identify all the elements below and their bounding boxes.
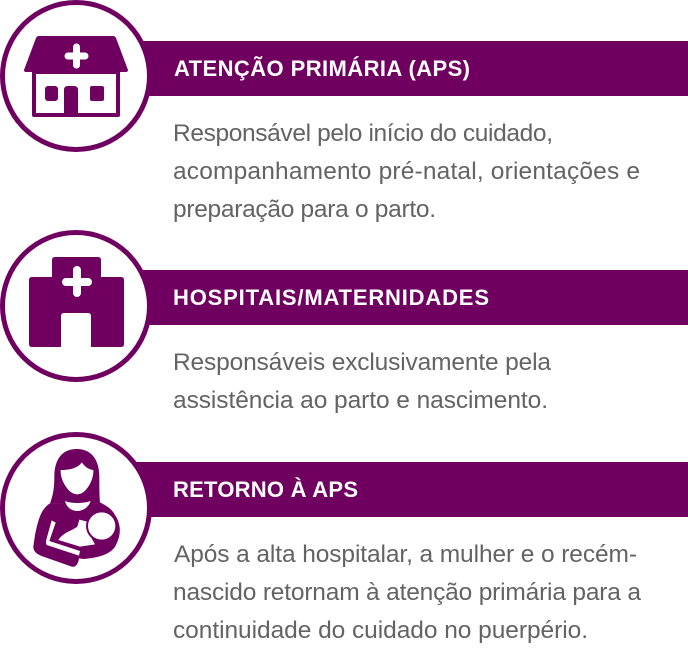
text block: hospitais/maternidades: assistência ao parto e nascimento. (173, 387, 548, 414)
panel: retorno à aps (2, 434, 688, 644)
heading bar: atenção primária (140, 41, 688, 96)
text block: retorno à aps (173, 541, 641, 644)
panel: hospitais/maternidades (2, 232, 688, 414)
icon: hospital (2, 232, 150, 380)
icon: mother holding baby (2, 434, 150, 582)
text block: retorno à aps: continuidade do cuidado no puerpério. (173, 617, 588, 644)
text block: retorno à aps: Após a alta hospitalar, a mulher e o recém- (174, 541, 637, 568)
text block: atenção primária: acompanhamento pré-natal, orientações e (173, 158, 640, 185)
text block: hospitais/maternidades (173, 349, 551, 414)
heading bar: atenção primária: ATENÇÃO PRIMÁRIA (APS) (174, 56, 470, 81)
heading bar: retorno à aps (130, 462, 688, 517)
icon: house with cross (2, 2, 150, 150)
heading bar: hospitais/maternidades: HOSPITAIS/MATERNIDADES (173, 285, 489, 310)
heading bar: retorno à aps: RETORNO À APS (173, 477, 358, 502)
text block: atenção primária: preparação para o parto. (173, 196, 436, 223)
heading bar: hospitais/maternidades (140, 270, 688, 325)
text block: atenção primária: Responsável pelo início do cuidado, (173, 120, 553, 147)
panel: atenção primária (2, 2, 688, 223)
text block: atenção primária (173, 120, 640, 223)
text block: hospitais/maternidades: Responsáveis exclusivamente pela (173, 349, 551, 376)
text block: retorno à aps: nascido retornam à atenção primária para a (173, 579, 641, 606)
